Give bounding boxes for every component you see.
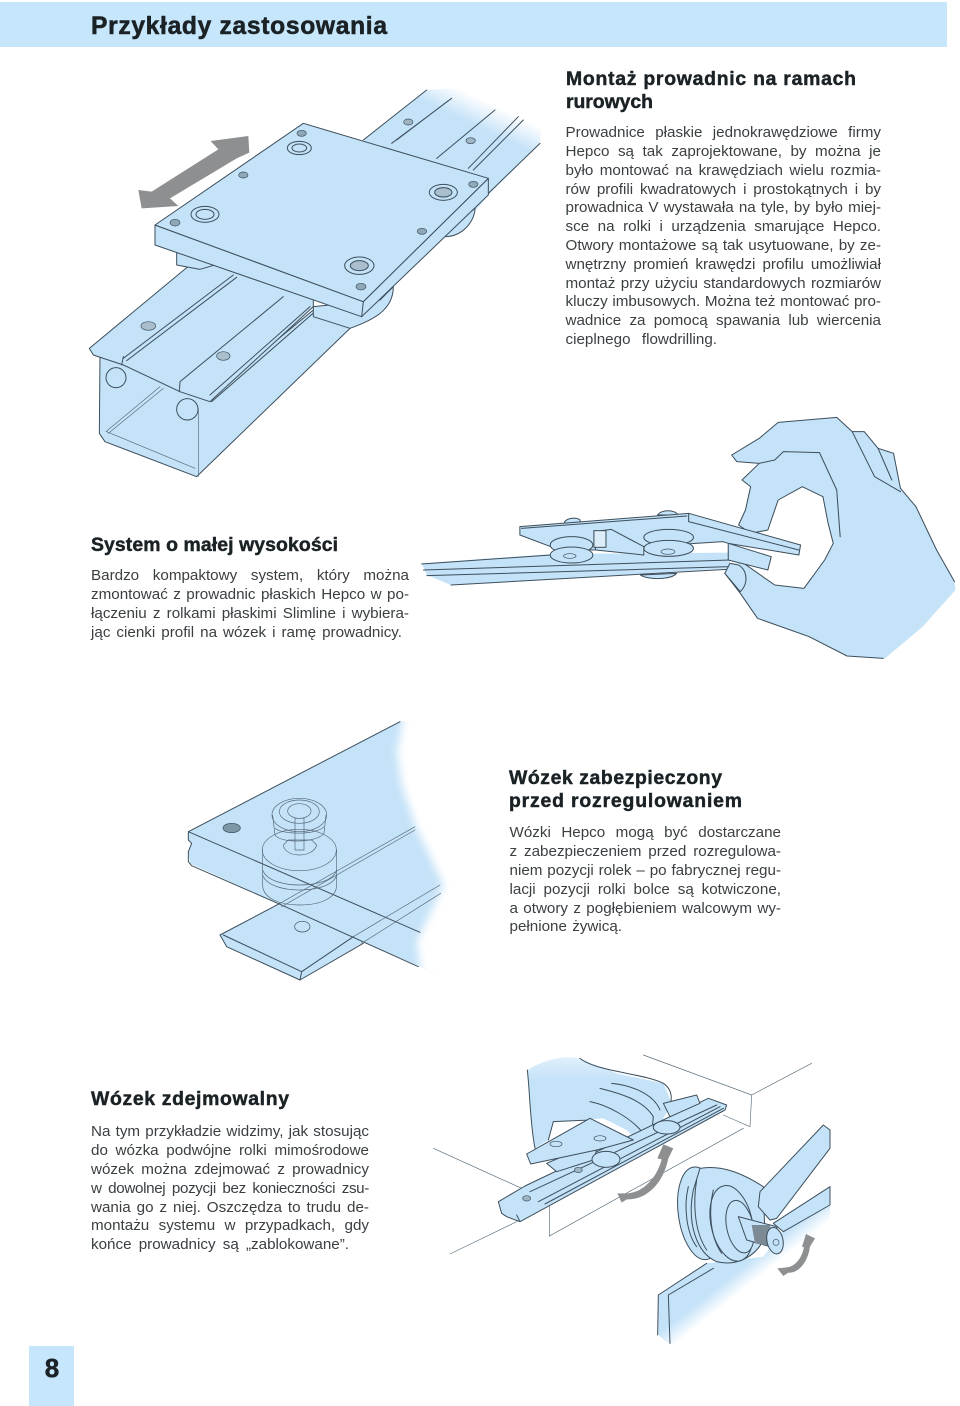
rail — [498, 1098, 727, 1222]
text block: locked carriage — [510, 824, 781, 935]
heading: Wózek zabezpieczony przed rozregulowaniem: przed rozregulowaniem — [509, 790, 742, 812]
thumb — [725, 563, 746, 592]
worktop outline — [433, 1055, 812, 1254]
text block: locked carriage: lacji pozycji rolki bolce są kotwiczone, — [510, 881, 781, 898]
text block: locked carriage: a otwory z pogłębieniem walcowym wy- — [510, 900, 781, 917]
lower rail — [220, 818, 443, 980]
roller shaft — [738, 1217, 786, 1255]
hand lines — [527, 1058, 671, 1148]
illustration: carriage on tubular frame — [89, 88, 542, 477]
illustration: locked carriage plate with roller — [188, 715, 473, 980]
icon: curved arrow on rail — [617, 1144, 673, 1203]
text block: removable carriage: wózek można zdejmować z prowadnicy — [91, 1161, 369, 1178]
soft fade on the wrist — [894, 587, 960, 683]
text block: tube frame mounting: montaż przy użyciu standardowych rozmiarów — [566, 275, 881, 292]
text block: locked carriage: pełnione żywicą. — [510, 918, 622, 935]
text block: low-profile system: Bardzo kompaktowy system, który można — [91, 567, 409, 584]
text block: tube frame mounting: prowadnica V wystawała na tyle, by było miej- — [566, 199, 881, 216]
text block: tube frame mounting: Hepco są tak zaprojektowane, by można je — [566, 143, 881, 160]
text block: tube frame mounting: rów profili kwadratowych i prostokątnych i by — [566, 181, 881, 198]
rail — [422, 553, 730, 585]
carriage plate — [527, 1095, 700, 1172]
text block: removable carriage — [91, 1123, 369, 1253]
heading: Wózek zabezpieczony przed rozregulowaniem — [509, 767, 742, 812]
hand outline and detail lines — [725, 417, 955, 658]
text block: removable carriage: do wózka podwójne rolki mimośrodowe — [91, 1142, 369, 1159]
text block: removable carriage: końce prowadnicy są „zablokowane”. — [91, 1236, 349, 1253]
page number tab: 8 — [45, 1353, 59, 1383]
text block: low-profile system: zmontować z prowadnic płaskich Hepco w po- — [91, 586, 409, 603]
top plate — [188, 722, 453, 975]
text block: low-profile system: jąc cienki profil na wózek i ramę prowadnicy. — [91, 624, 402, 641]
wrench — [758, 1125, 830, 1232]
rail edges — [220, 827, 441, 980]
text block: low-profile system — [90, 567, 409, 641]
roller and bolt seen through the plate — [262, 798, 337, 905]
text block: locked carriage: Wózki Hepco mogą być dostarczane — [510, 824, 781, 841]
hand — [725, 417, 956, 658]
text block: tube frame mounting: kluczy imbusowych. Można też montować pro- — [566, 293, 881, 310]
header band — [0, 2, 947, 47]
front section of tube — [99, 310, 350, 477]
text block: low-profile system: łączeniu z rolkami płaskimi Slimline i wybiera- — [91, 605, 409, 622]
rear section of tube and rails — [363, 88, 542, 213]
heading: System o małej wysokości: System o małej wysokości — [91, 534, 338, 556]
rail left — [89, 257, 313, 402]
rollers under plate — [177, 208, 475, 328]
text block: tube frame mounting: Otwory montażowe są tak usytuowane, by ze- — [566, 237, 881, 254]
text block: locked carriage: z zabezpieczeniem przed rozregulowa- — [510, 843, 781, 860]
rail details — [122, 275, 315, 402]
text block: tube frame mounting: wnętrzny promień krawędzi profilu umożliwiał — [566, 256, 881, 273]
illustration: removable carriage and eccentric roller — [433, 1055, 830, 1350]
eccentric roller — [672, 1164, 765, 1265]
text block: tube frame mounting: Prowadnice płaskie jednokrawędziowe firmy — [566, 124, 881, 141]
icon: curved arrow on wrench — [777, 1234, 815, 1276]
text block: removable carriage: w dowolnej pozycji bez konieczności zsu- — [91, 1180, 369, 1197]
mounting panel — [658, 1200, 830, 1350]
text block: tube frame mounting: sce na rolki i urządzenia smarujące Hepco. — [566, 218, 881, 235]
icon: double-headed movement arrow — [138, 136, 249, 208]
heading: Montaż prowadnic na ramach rurowych: rurowych — [566, 91, 653, 113]
soft fade on the right edge — [397, 715, 473, 978]
carriage plate — [520, 511, 801, 579]
heading: Wózek zabezpieczony przed rozregulowaniem: Wózek zabezpieczony — [509, 767, 722, 789]
mounting plate — [155, 123, 488, 317]
text block: locked carriage: niem pozycji rolek – po fabrycznej regu- — [510, 862, 781, 879]
text block: tube frame mounting: wadnice za pomocą spawania lub wiercenia — [566, 312, 881, 329]
fixing hole — [223, 823, 240, 833]
text block: tube frame mounting: było montować na krawędziach wielu rozmia- — [566, 162, 881, 179]
heading: Wózek zdejmowalny: Wózek zdejmowalny — [91, 1088, 289, 1110]
heading: Montaż prowadnic na ramach rurowych: Montaż prowadnic na ramach — [566, 68, 856, 90]
page number tab — [29, 1346, 74, 1406]
text block: removable carriage: Na tym przykładzie widzimy, jak stosując — [91, 1123, 369, 1140]
plate edges — [188, 722, 420, 967]
illustration: low-profile system held in a hand — [422, 417, 960, 683]
hand — [527, 1057, 672, 1148]
text block: tube frame mounting: cieplnego flowdrilling. — [566, 331, 717, 348]
text block: removable carriage: montażu systemu w przypadkach, gdy — [91, 1217, 369, 1234]
title: Przykłady zastosowania — [91, 13, 387, 40]
text block: removable carriage: wania go z niej. Oszczędza to trudu de- — [91, 1199, 369, 1216]
heading: Montaż prowadnic na ramach rurowych — [566, 68, 856, 113]
text block: tube frame mounting — [566, 124, 881, 348]
